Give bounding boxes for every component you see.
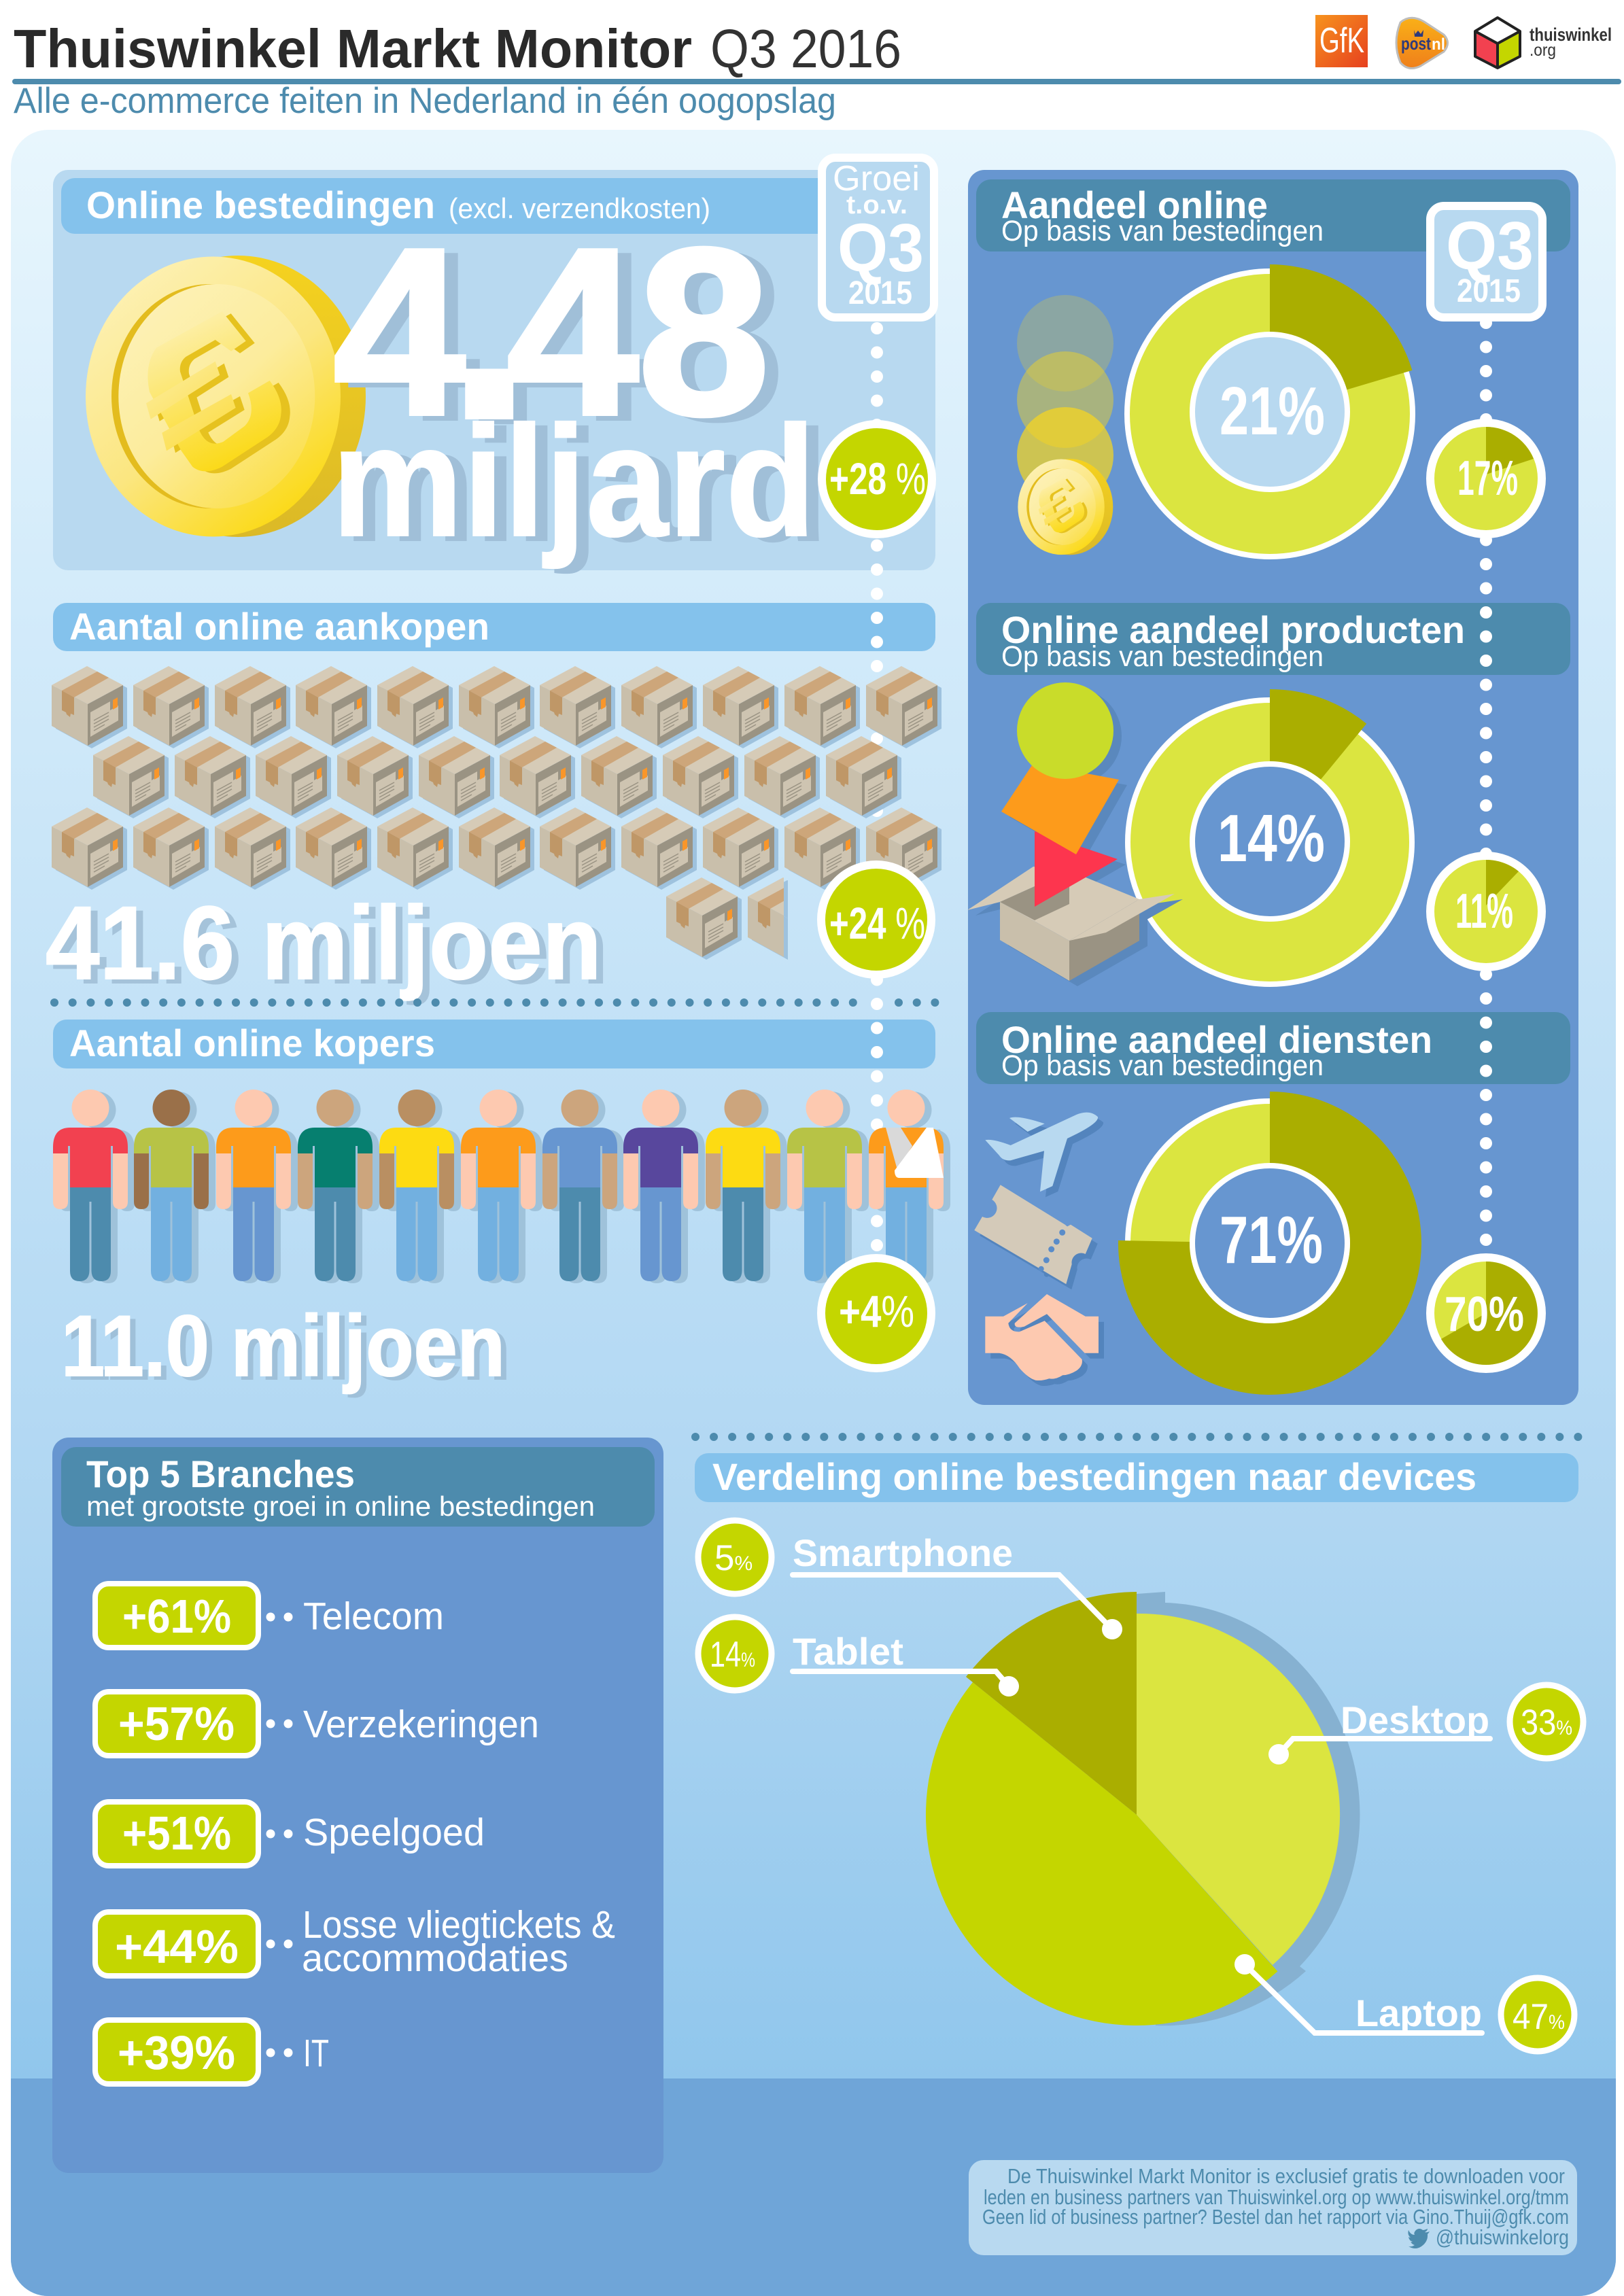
heading: top 5 branches: Top 5 Branches (86, 1453, 355, 1495)
icon group: parcels (52, 666, 937, 957)
heading: aandeel online: Op basis van bestedingen (1001, 215, 1324, 247)
subtitle: Alle e-commerce feiten in Nederland in één oogopslag (14, 81, 836, 121)
donut chart: 14%: 14% (1217, 801, 1325, 875)
row: losse vliegtickets en accommodaties: accommodaties (302, 1936, 568, 1980)
logo: PostNL (1396, 18, 1448, 69)
heading: top 5 branches (61, 1447, 655, 1527)
logo: GfK: GfK (1319, 21, 1364, 60)
donut chart: 21% (1127, 264, 1413, 557)
logo: thuiswinkel.org (1475, 18, 1612, 68)
callout: smartphone: 5% (714, 1538, 753, 1578)
icon: coin stack (1017, 295, 1113, 555)
callout: laptop: 47% (1513, 1997, 1565, 2037)
label: Q3 2015: Q3 (1446, 208, 1534, 284)
small pie: 17% (1430, 423, 1542, 534)
donut chart: 71%: 71% (1220, 1202, 1323, 1277)
heading: aandeel online (976, 179, 1570, 251)
row: speelgoed (95, 1802, 485, 1866)
person 6 (461, 1090, 536, 1281)
heading: online bestedingen: Online bestedingen (86, 184, 435, 226)
bar: aantal online aankopen (53, 603, 935, 651)
person 9 (706, 1090, 780, 1281)
coin icon large (86, 256, 366, 537)
big number 4.48: 8 (638, 199, 770, 465)
bar: aantal online kopers: Aantal online kopers (69, 1022, 435, 1064)
heading note: (excl. verzendkosten) (449, 192, 710, 224)
person 4 (298, 1090, 373, 1281)
panel: online bestedingen (53, 170, 935, 570)
row: verzekeringen: +57% (118, 1697, 235, 1750)
bar: aantal online aankopen: Aantal online aankopen (69, 605, 489, 648)
small pie: 11% (1430, 856, 1542, 967)
person 3 (216, 1090, 291, 1281)
big number 11.0 miljoen: 11.0 miljoen (61, 1298, 505, 1394)
title: Thuiswinkel Markt Monitor (14, 18, 692, 79)
row: losse vliegtickets en accommodaties (95, 1903, 615, 1980)
big number 4.48: 4 (506, 199, 640, 465)
row: verzekeringen: Verzekeringen (303, 1703, 539, 1746)
heading: online aandeel diensten: Op basis van bestedingen (1001, 1049, 1324, 1082)
callout: desktop: 33% (1521, 1703, 1572, 1743)
callout: laptop: Laptop (1355, 1991, 1482, 2034)
parcels row 4 (666, 877, 819, 957)
callout: tablet: Tablet (793, 1630, 903, 1673)
person 8 (623, 1090, 698, 1281)
growth badge +28%: +28 % (829, 453, 926, 504)
label: groei t.o.v. Q3 2015: t.o.v. (846, 191, 908, 220)
small pie: 70% (1430, 1257, 1542, 1369)
parcels row 1 (52, 666, 937, 746)
row: speelgoed: +51% (122, 1807, 231, 1860)
row: telecom: Telecom (303, 1595, 444, 1638)
callout: tablet (698, 1617, 1019, 1697)
big word miljard: miljard (332, 394, 816, 570)
person 1 (53, 1090, 128, 1281)
growth badge +24% (821, 865, 931, 975)
icon: handshake (985, 1294, 1099, 1380)
row: telecom (95, 1584, 444, 1648)
donut chart: 71% (1118, 1092, 1421, 1395)
donut chart: 14% (1128, 689, 1412, 984)
big number 4.48: . (446, 135, 533, 484)
label: groei t.o.v. Q3 2015: Groei (833, 159, 920, 198)
label: Q3 2015: 2015 (1457, 273, 1521, 309)
big number 41.6 miljoen: 41.6 miljoen (46, 885, 602, 1001)
row: losse vliegtickets en accommodaties: +44% (115, 1920, 239, 1973)
callout: desktop (1268, 1685, 1583, 1764)
row: IT: IT (303, 2032, 329, 2075)
donut chart: 21%: 21% (1220, 373, 1325, 449)
heading: online aandeel producten: Online aandeel producten (1001, 608, 1465, 651)
logo: thuiswinkel.org: .org (1530, 41, 1556, 60)
small pie: 11%: 11% (1455, 884, 1513, 939)
small pie: 17%: 17% (1457, 451, 1518, 506)
row: losse vliegtickets en accommodaties: Losse vliegtickets & (303, 1903, 615, 1947)
label: groei t.o.v. Q3 2015: Q3 (837, 210, 924, 286)
growth badge +28% (822, 424, 932, 534)
logo: PostNL: nl (1432, 35, 1445, 54)
title: Q3 2016 (710, 18, 901, 79)
slice: desktop 33% (1137, 1614, 1340, 1965)
label: groei t.o.v. Q3 2015: 2015 (848, 275, 912, 311)
logo: GfK (1315, 15, 1368, 67)
person 5 (379, 1090, 454, 1281)
row: IT (95, 2020, 329, 2084)
person 2 (134, 1090, 209, 1281)
pie chart: devices (926, 1592, 1360, 2025)
icon group: people (53, 1090, 944, 1281)
icon: ticket (974, 1185, 1092, 1284)
heading: top 5 branches: met grootste groei in online bestedingen (86, 1491, 595, 1522)
row: verzekeringen (95, 1692, 539, 1756)
slice: tablet and smartphone (966, 1592, 1137, 1815)
callout: desktop: Desktop (1341, 1699, 1489, 1741)
growth badge +24%: +24 % (829, 898, 925, 948)
person 11 with sling (869, 1090, 944, 1281)
label: Q3 2015 (1430, 206, 1542, 317)
dotted line: Q3 2015 column right (1480, 323, 1492, 1244)
person 7 (542, 1090, 617, 1281)
small pie: 70%: 70% (1445, 1287, 1524, 1342)
row: IT: +39% (118, 2026, 235, 2079)
callout: smartphone (698, 1520, 1122, 1639)
panel: aandeel online (right column) (968, 170, 1578, 1405)
callout: tablet: 14% (710, 1635, 755, 1675)
icon: twitter bird (1408, 2229, 1430, 2248)
label: groei t.o.v. Q3 2015 (822, 158, 934, 317)
icon: airplane (985, 1113, 1098, 1192)
heading: online aandeel diensten: Online aandeel diensten (1001, 1018, 1432, 1061)
row: speelgoed: Speelgoed (303, 1811, 485, 1854)
footer note: @thuiswinkelorg (1436, 2225, 1569, 2249)
parcels row 2 (93, 736, 897, 816)
slice: laptop 47% (926, 1682, 1277, 2025)
heading bar: online bestedingen (61, 178, 877, 234)
parcels row 3 (52, 807, 937, 887)
footer note: De Thuiswinkel Markt Monitor is exclusief gratis te downloaden voor (1007, 2164, 1565, 2188)
icon: open box with shapes (967, 682, 1175, 981)
growth badge +4% (821, 1258, 931, 1368)
callout: smartphone: Smartphone (793, 1531, 1013, 1574)
heading: online aandeel producten (976, 603, 1570, 675)
heading: online aandeel producten: Op basis van bestedingen (1001, 640, 1324, 673)
panel: top 5 branches (52, 1438, 663, 2173)
footer note (969, 2160, 1577, 2255)
growth badge +4%: +4% (839, 1286, 914, 1336)
row: telecom: +61% (122, 1590, 231, 1643)
person 10 (787, 1090, 862, 1281)
dotted line: growth column left (871, 328, 883, 1257)
callout: laptop (1234, 1954, 1574, 2051)
heading: aandeel online: Aandeel online (1001, 184, 1268, 226)
heading: online aandeel diensten (976, 1012, 1570, 1084)
big number 4.48: 4 (333, 199, 467, 465)
logo: PostNL: post (1401, 33, 1431, 54)
bar: aantal online kopers (53, 1020, 935, 1068)
bar: verdeling online bestedingen naar devices: Verdeling online bestedingen naar devices (712, 1455, 1476, 1498)
